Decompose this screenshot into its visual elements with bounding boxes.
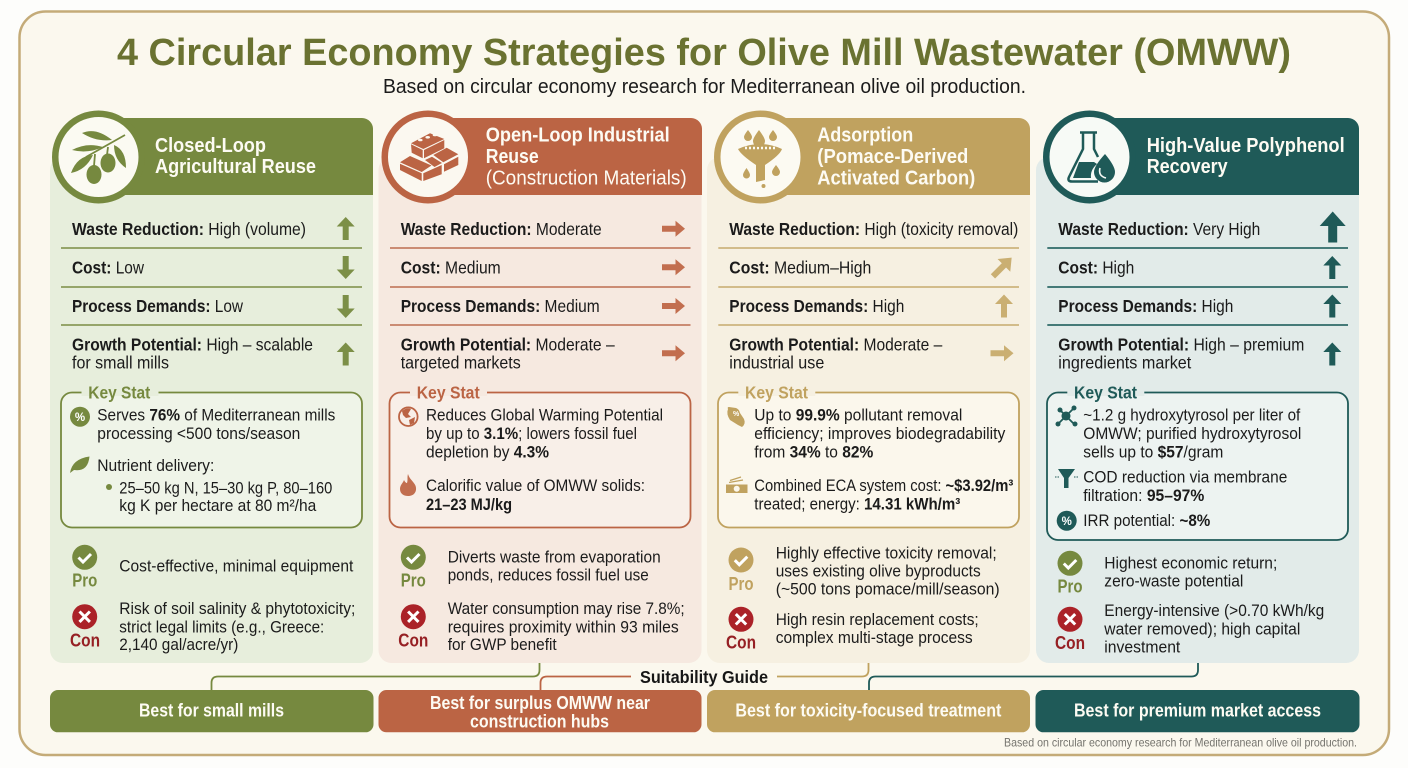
ratings: for small mills <box>72 352 169 372</box>
pro: Pro <box>728 574 754 594</box>
key stat box <box>1047 382 1348 540</box>
key stat box: COD reduction via membrane <box>1083 468 1287 487</box>
pro: Diverts waste from evaporation <box>448 547 661 566</box>
con <box>398 599 685 654</box>
ratings: Cost: Low <box>72 258 144 278</box>
ratings <box>61 217 362 372</box>
suitability: small mills <box>50 690 374 732</box>
suitability guide label: Suitability Guide <box>640 667 768 687</box>
ratings: industrial use <box>729 352 824 372</box>
con <box>726 607 979 652</box>
icon: olive branch <box>55 114 142 200</box>
con: Con <box>70 631 100 651</box>
heading <box>1147 135 1345 178</box>
suitability: small mills: Best for small mills <box>139 701 284 721</box>
heading: Recovery <box>1147 156 1228 178</box>
heading: Activated Carbon) <box>817 168 975 190</box>
ratings: Growth Potential: Moderate – <box>401 334 615 354</box>
key stat box: Key Stat <box>417 382 480 402</box>
con: investment <box>1104 637 1181 656</box>
ratings: Cost: High <box>1058 258 1134 278</box>
icon: bricks <box>385 114 471 200</box>
con: Con <box>726 632 756 652</box>
pro: (~500 tons pomace/mill/season) <box>776 579 1000 598</box>
suitability: premium market <box>1036 690 1360 732</box>
ratings <box>718 219 1019 372</box>
ratings: ingredients market <box>1058 352 1191 372</box>
key stat box: IRR potential: ~8% <box>1083 511 1210 530</box>
pro: zero-waste potential <box>1104 572 1243 591</box>
suitability: surplus OMWW: Best for surplus OMWW near <box>430 693 650 713</box>
key stat box: efficiency; improves biodegradability <box>754 424 1006 443</box>
key stat box: % <box>75 412 85 424</box>
ratings: targeted markets <box>401 352 521 372</box>
heading: Adsorption <box>817 125 913 147</box>
pro: Pro <box>1058 577 1082 597</box>
key stat box: processing <500 tons/season <box>97 424 300 443</box>
key stat box: 25–50 kg N, 15–30 kg P, 80–160 <box>119 478 332 497</box>
panel: open-loop industrial reuse <box>378 114 702 663</box>
key stat box: filtration: 95–97% <box>1083 486 1204 505</box>
con: Con <box>398 631 428 651</box>
con: strict legal limits (e.g., Greece: <box>119 617 324 636</box>
suitability: surplus OMWW: construction hubs <box>470 711 609 731</box>
pro: Pro <box>401 571 426 591</box>
heading <box>155 135 316 178</box>
panel: adsorption <box>707 114 1030 663</box>
key stat box: ~1.2 g hydroxytyrosol per liter of <box>1083 406 1301 425</box>
con: High resin replacement costs; <box>776 610 979 629</box>
ratings: Process Demands: Medium <box>401 296 600 316</box>
suitability: premium market: Best for premium market access <box>1074 701 1321 721</box>
heading: Open-Loop Industrial <box>486 125 670 147</box>
pro <box>1058 551 1277 597</box>
key stat box: Key Stat <box>745 382 808 402</box>
suitability: toxicity-focused: Best for toxicity-focused treatment <box>735 701 1001 721</box>
key stat box: by up to 3.1%; lowers fossil fuel <box>426 424 637 443</box>
heading: (Pomace-Derived <box>817 146 968 168</box>
connector: teal <box>869 663 1198 690</box>
header band <box>1089 118 1359 195</box>
connector: terracotta <box>540 676 631 690</box>
pro <box>728 543 1000 598</box>
footnote: Based on circular economy research for Mediterranean olive oil production. <box>1004 736 1357 750</box>
key stat box: Serves 76% of Mediterranean mills <box>97 406 335 425</box>
con <box>70 599 355 654</box>
key stat box: % <box>1062 516 1072 528</box>
pro: Highest economic return; <box>1104 553 1277 572</box>
pro: Highly effective toxicity removal; <box>776 543 997 562</box>
suitability: toxicity-focused <box>707 690 1030 732</box>
header band <box>759 118 1030 195</box>
con: Energy-intensive (>0.70 kWh/kg <box>1104 601 1324 620</box>
heading: Closed-Loop <box>155 135 266 157</box>
con: Risk of soil salinity & phytotoxicity; <box>119 599 355 618</box>
ratings: Waste Reduction: Very High <box>1058 219 1260 239</box>
ratings: Waste Reduction: High (volume) <box>72 219 306 239</box>
pro: ponds, reduces fossil fuel use <box>448 566 649 585</box>
ratings: Growth Potential: High – scalable <box>72 334 313 354</box>
con: 2,140 gal/acre/yr) <box>119 635 238 654</box>
header band <box>427 118 702 195</box>
ratings: Waste Reduction: Moderate <box>401 219 602 239</box>
key stat box <box>718 382 1019 528</box>
panel: high-value polyphenol recovery <box>1036 114 1359 663</box>
key stat box: depletion by 4.3% <box>426 442 549 461</box>
key stat box: Up to 99.9% pollutant removal <box>754 406 962 425</box>
ratings <box>1047 212 1348 372</box>
con: requires proximity within 93 miles <box>448 617 679 636</box>
pro: Cost-effective, minimal equipment <box>119 557 354 576</box>
ratings: Waste Reduction: High (toxicity removal) <box>729 219 1018 239</box>
connector: tan <box>777 663 868 676</box>
key stat box <box>61 382 362 528</box>
key stat box: from 34% to 82% <box>754 442 873 461</box>
ratings <box>390 219 690 372</box>
key stat box: Reduces Global Warming Potential <box>426 406 663 425</box>
suitability: surplus OMWW <box>378 690 702 732</box>
connector: green <box>212 663 540 690</box>
pro <box>401 545 661 591</box>
con: Con <box>1055 633 1085 653</box>
ratings: Process Demands: High <box>729 296 904 316</box>
con: for GWP benefit <box>448 635 557 654</box>
pro: uses existing olive byproducts <box>776 562 981 581</box>
key stat box: Nutrient delivery: <box>97 456 214 475</box>
key stat box: Combined ECA system cost: ~$3.92/m³ <box>754 476 1014 495</box>
key stat box: Key Stat <box>1074 382 1137 402</box>
key stat box: Key Stat <box>88 382 150 402</box>
heading: (Construction Materials) <box>486 168 687 190</box>
heading <box>486 125 687 190</box>
subtitle: Based on circular economy research for Mediterranean olive oil production. <box>383 76 1026 98</box>
ratings: Process Demands: Low <box>72 296 243 316</box>
ratings: Process Demands: High <box>1058 296 1233 316</box>
key stat box: OMWW; purified hydroxytyrosol <box>1083 424 1301 443</box>
key stat box: kg K per hectare at 80 m²/ha <box>119 496 317 515</box>
key stat box: Calorific value of OMWW solids: <box>426 476 645 495</box>
icon: flask and drop <box>1046 114 1133 200</box>
header band <box>98 118 373 195</box>
key stat box: treated; energy: 14.31 kWh/m³ <box>754 494 961 514</box>
pro: Pro <box>72 571 97 591</box>
panel: closed-loop agricultural reuse <box>50 114 373 663</box>
key stat box: 21–23 MJ/kg <box>426 495 512 514</box>
con: complex multi-stage process <box>776 628 973 647</box>
heading: High-Value Polyphenol <box>1147 135 1345 157</box>
ratings: Cost: Medium–High <box>729 258 871 278</box>
key stat box: % <box>733 411 740 418</box>
heading: Reuse <box>486 146 539 168</box>
con: Water consumption may rise 7.8%; <box>448 599 685 618</box>
icon: funnel with drops <box>717 114 804 200</box>
con: water removed); high capital <box>1103 619 1300 638</box>
heading: Agricultural Reuse <box>155 156 316 178</box>
key stat box: sells up to $57/gram <box>1083 442 1223 461</box>
pro <box>72 545 354 591</box>
ratings: Cost: Medium <box>401 258 501 278</box>
title: 4 Circular Economy Strategies for Olive Mill Wastewater (OMWW) <box>117 32 1291 74</box>
con <box>1055 601 1324 656</box>
ratings: Growth Potential: High – premium <box>1058 334 1304 354</box>
ratings: Growth Potential: Moderate – <box>729 334 943 354</box>
heading <box>817 125 975 190</box>
key stat box <box>390 382 690 528</box>
